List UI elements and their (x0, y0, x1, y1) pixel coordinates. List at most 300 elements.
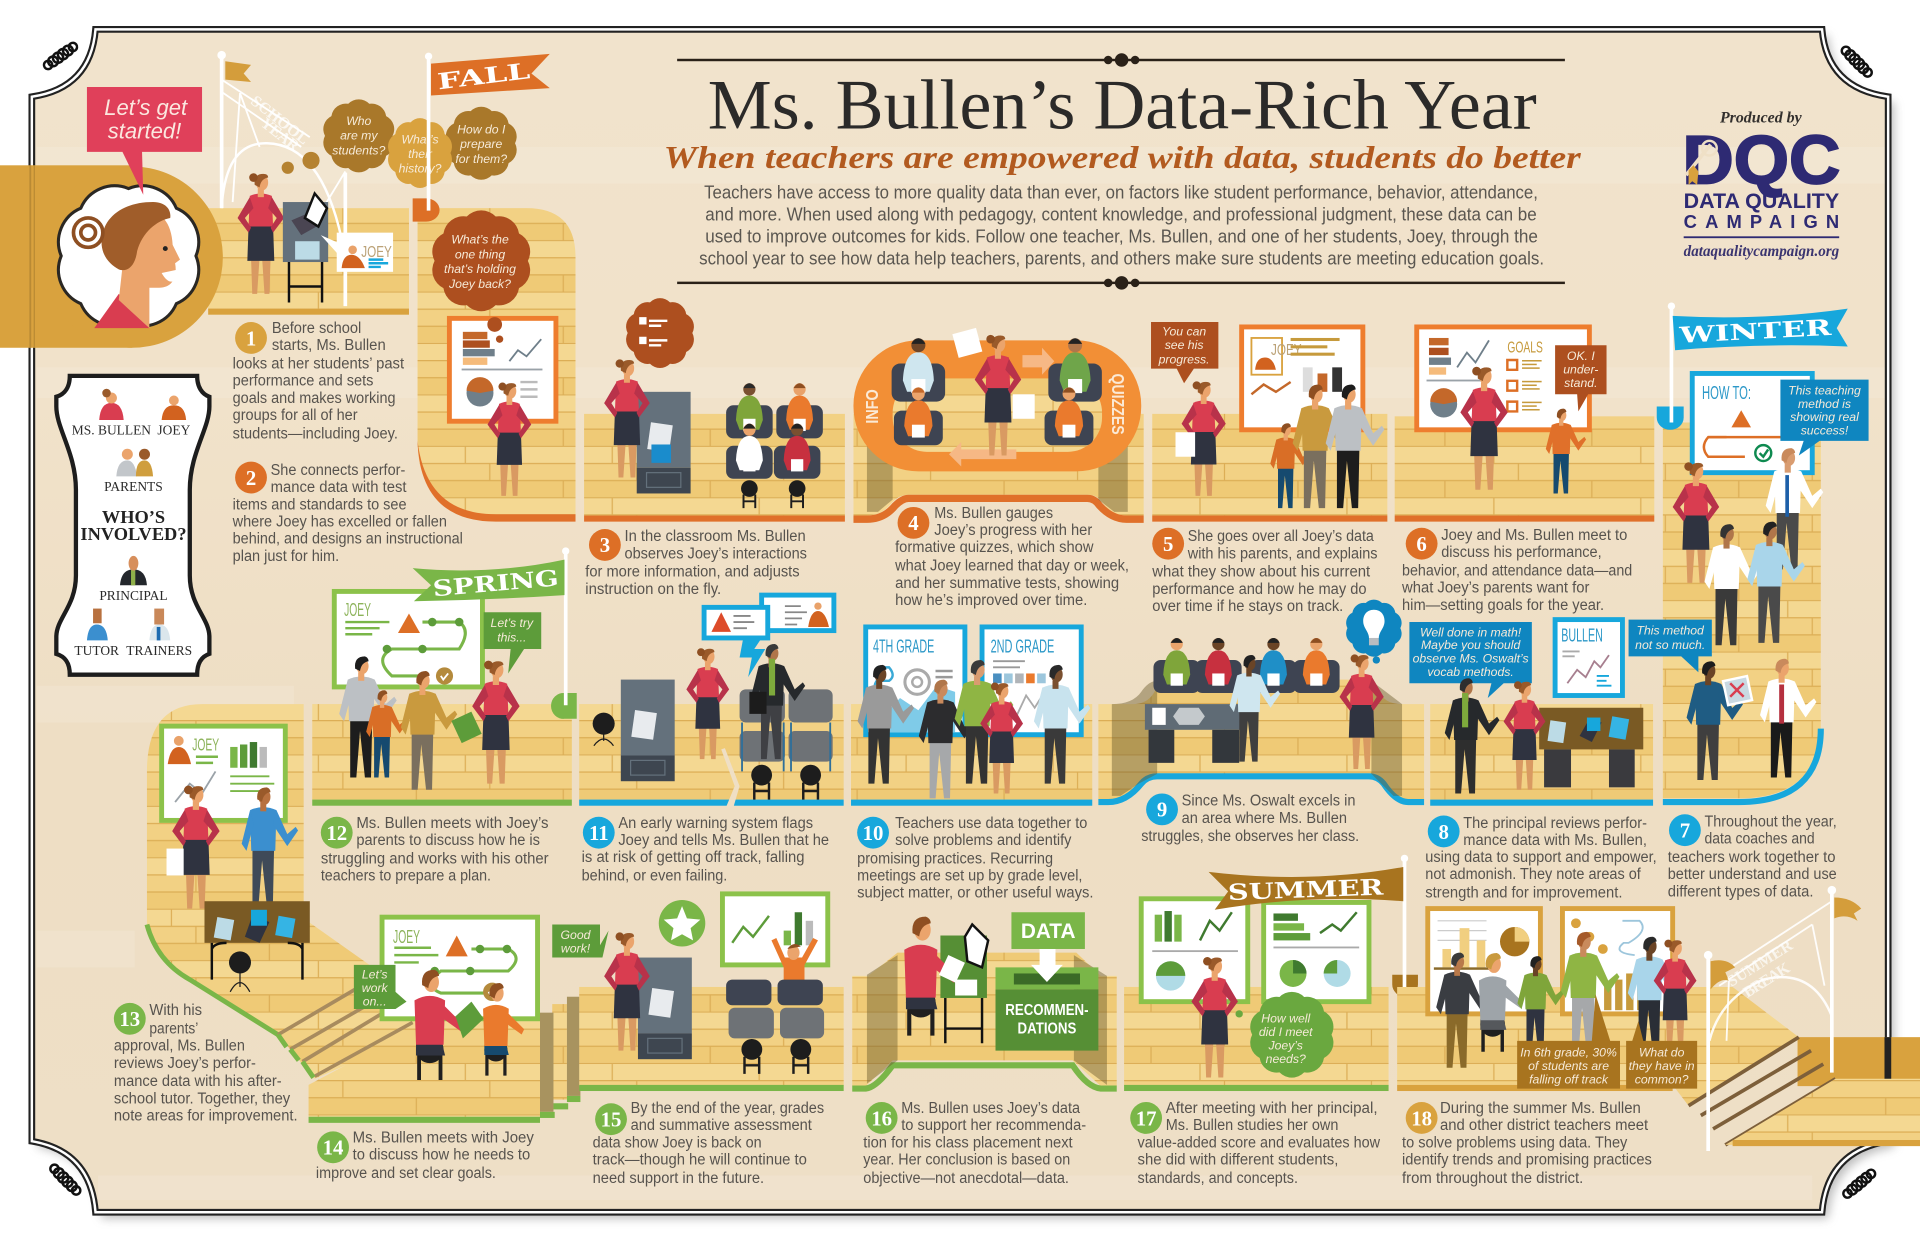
badge 8: 8 (1438, 820, 1449, 844)
text 10: meetings are set up by grade level, (857, 867, 1082, 884)
text 4: Joey’s progress with her (934, 522, 1092, 539)
desk (638, 958, 692, 1059)
text 1: Before school (272, 320, 361, 337)
badge 5 (1152, 528, 1184, 560)
cloud: how well did I meet needs (1236, 992, 1333, 1078)
cloud: how do I prepare (446, 107, 517, 180)
badge 18: 18 (1411, 1106, 1432, 1130)
badge 14: 14 (323, 1136, 344, 1160)
alert window: warning (704, 607, 768, 638)
title: Ms. Bullen’s Data-Rich Year (708, 67, 1537, 145)
floor (312, 704, 572, 806)
text 7: data coaches and (1704, 831, 1815, 848)
step 10 (857, 815, 1093, 902)
bubble: let's try this: Let’s try (491, 616, 534, 630)
badge 11 (583, 817, 615, 849)
portrait medallion (42, 167, 223, 348)
box: data (1011, 912, 1085, 949)
subtitle: When teachers are empowered with data, students do better (664, 140, 1582, 175)
student: green (726, 383, 773, 438)
icon: principal (120, 556, 147, 585)
step 17 (1130, 1100, 1381, 1187)
bubble: you can see his progress: see his (1165, 338, 1203, 352)
header block (664, 53, 1582, 290)
text 15: data show Joey is back on (593, 1134, 762, 1151)
student: orange (776, 383, 823, 438)
names row: MS. BULLEN (72, 423, 151, 438)
bubble: teaching method success: showing real (1790, 410, 1859, 424)
figure: Ms. Bullen (604, 932, 650, 1051)
text 5: She goes over all Joey’s data (1188, 528, 1374, 545)
floor (851, 704, 1092, 806)
floor: summer break (1725, 1079, 1920, 1145)
desk (204, 901, 310, 980)
floor (1152, 414, 1387, 522)
cloud: who are my students: are my (340, 129, 378, 143)
label: info: INFO (862, 389, 882, 424)
scalloped frame (58, 186, 199, 326)
corner ornament: top right (1839, 44, 1874, 79)
figure: tutor (242, 787, 298, 906)
face (119, 210, 180, 328)
flag: gate right (1834, 898, 1861, 921)
text 17: Ms. Bullen studies her own (1166, 1117, 1338, 1134)
poster: Bullen (1555, 620, 1622, 696)
text 6: behavior, and attendance data—and (1402, 563, 1632, 580)
figure: Ms. Bullen (1673, 462, 1719, 583)
text 10: Teachers use data together to (895, 815, 1087, 832)
text 16: year. Her conclusion is based on (863, 1151, 1070, 1168)
figure: Ms. Bullen (472, 661, 520, 784)
floor (584, 414, 845, 522)
figure: teacher in grey (858, 665, 914, 784)
text 1: groups for all of her (233, 407, 358, 424)
text 6: Joey and Ms. Bullen meet to (1441, 527, 1627, 544)
figure: Joey seated (483, 983, 524, 1076)
cloud: how well did I meet needs: Joey’s (1267, 1038, 1303, 1052)
card: Joey: JOEY (361, 244, 392, 261)
bubble: teaching method success (1780, 380, 1869, 456)
students watching (1153, 638, 1340, 693)
text 13: approval, Ms. Bullen (114, 1038, 245, 1055)
papers (939, 955, 965, 983)
text 3: In the classroom Ms. Bullen (624, 528, 806, 545)
poster: Joey plan (382, 917, 538, 1019)
text 11 (582, 815, 829, 884)
text 15 (593, 1100, 824, 1187)
figure: teacher in pale blue (1628, 937, 1684, 1056)
text 11: is at risk of getting off track, falling (582, 849, 804, 866)
badge 1 (235, 322, 267, 354)
corner ornament: top left (42, 40, 79, 72)
poster: how to (1692, 373, 1812, 473)
cloud: who are my students (323, 99, 394, 172)
bubble: teaching method success: This teaching (1788, 383, 1861, 397)
labels: tutor and trainers: TRAINERS (126, 643, 192, 658)
text 10: promising practices. Recurring (857, 850, 1053, 867)
figure: Ms. Bullen (1460, 367, 1508, 490)
text 11: An early warning system flags (618, 815, 813, 832)
badge 7: 7 (1680, 819, 1690, 843)
bubble: let's work on: Let’s (362, 967, 388, 981)
floor stripe (852, 1065, 1117, 1089)
figure: principal on phone (749, 644, 805, 759)
bubble: method not so much: This method (1637, 623, 1705, 637)
hair (102, 202, 170, 270)
floor (418, 208, 576, 516)
mouth (162, 269, 179, 282)
badge 6 (1406, 528, 1438, 560)
icon: trainers (149, 609, 170, 640)
figure: Joey (1546, 409, 1586, 493)
figure: Ms. Bullen seated (414, 970, 484, 1080)
text 3: observes Joey’s interactions (624, 545, 807, 562)
text 4: formative quizzes, which show (895, 539, 1094, 556)
bubble: well done in math: Well done in math! (1420, 626, 1522, 640)
chairs (740, 689, 833, 800)
text 3 (585, 528, 807, 598)
badge 9 (1146, 793, 1178, 825)
student: red (774, 424, 820, 479)
gate text: BREAK (1740, 959, 1794, 1001)
text 7: different types of data. (1668, 883, 1813, 900)
text 3: for more information, and adjusts (585, 564, 800, 581)
card with cross (1723, 676, 1752, 705)
text 6 (1401, 527, 1632, 614)
text 14: Ms. Bullen meets with Joey (353, 1129, 534, 1146)
floor with tunnel (853, 414, 1144, 516)
figure: mother (1293, 385, 1351, 508)
scene: formative quizzes (853, 328, 1144, 519)
poster: bar chart (1428, 909, 1540, 1014)
text 12: teachers to prepare a plan. (321, 867, 491, 884)
bubble: OK I understand: under- (1563, 362, 1598, 376)
floor (852, 953, 1117, 1086)
poster: Joey plan: JOEY (393, 926, 420, 947)
text 6: discuss his performance, (1441, 544, 1602, 561)
text 8: The principal reviews perfor- (1463, 815, 1647, 832)
text 9: Since Ms. Oswalt excels in (1182, 793, 1356, 810)
badge 6: 6 (1416, 532, 1427, 556)
text 4 (894, 505, 1129, 609)
bottom rule (677, 276, 1565, 290)
step 12 (321, 815, 549, 884)
badge 15: 15 (601, 1108, 621, 1132)
text 14: to discuss how he needs to (353, 1147, 530, 1164)
text 18 (1402, 1100, 1652, 1187)
desk (637, 392, 691, 493)
badge 4 (898, 507, 929, 539)
callout: let's get started (87, 87, 202, 195)
badge 8 (1428, 816, 1460, 847)
text 12 (321, 815, 549, 884)
website: dataqualitycampaign.org (1684, 243, 1840, 260)
text 2: mance data with test (271, 479, 407, 496)
text 8: mance data with Ms. Bullen, (1463, 832, 1647, 849)
bubble: method not so much (1629, 620, 1712, 672)
labels: tutor and trainers (74, 643, 192, 658)
poster: left (1141, 899, 1248, 1002)
bubble: teaching method success: success! (1801, 424, 1849, 438)
text 4: how he’s improved over time. (895, 592, 1087, 609)
text 7: Throughout the year, (1704, 814, 1837, 831)
desk with laptop (940, 924, 988, 1043)
produced by: Produced by (1720, 109, 1803, 126)
cloud: one thing holding Joey back: What’s the (451, 233, 509, 247)
bubble: you can see his progress (1151, 322, 1218, 383)
corner ornament: bottom left (48, 1162, 83, 1197)
badge 2 (235, 462, 267, 493)
tunnel shading (867, 955, 1107, 1085)
text 15: track—though he will continue to (593, 1151, 807, 1168)
poster: 4th grade: 4TH GRADE (873, 636, 934, 657)
stool (593, 713, 615, 746)
text 5: with his parents, and explains (1187, 545, 1378, 562)
step 7 (1668, 814, 1837, 900)
figure: Ms. Bullen (686, 648, 729, 759)
floor (1663, 422, 1821, 798)
box: data: DATA (1021, 920, 1075, 943)
step 4 (894, 505, 1129, 609)
text 13: note areas for improvement. (114, 1107, 298, 1124)
student: bottom right (1045, 387, 1093, 445)
figure: Ms. Bullen (1654, 940, 1697, 1051)
tunnel shading (1112, 681, 1402, 796)
floor stripe (1098, 776, 1424, 802)
text 2: where Joey has excelled or fallen (232, 514, 447, 531)
bubble: what do they have in common: What do (1639, 1046, 1685, 1060)
figure: teacher with red tie (1760, 659, 1816, 778)
figure: Joey cheering (771, 938, 818, 986)
names row: JOEY (157, 423, 191, 438)
text 16: tion for his class placement next (863, 1134, 1073, 1151)
bubble: 6th grade 30 percent: falling off track (1529, 1073, 1609, 1087)
bubble: what do they have in common (1626, 1021, 1697, 1089)
cloud: one thing holding Joey back (432, 210, 530, 311)
cloud: what's their history: What’s (401, 132, 439, 146)
floor upper (147, 704, 416, 1079)
figure: father (339, 656, 397, 778)
text 13: With his (149, 1002, 202, 1019)
floor crack (721, 748, 740, 807)
box: recommendations: RECOMMEN- (1005, 1002, 1089, 1019)
gate text: YEAR (257, 115, 303, 155)
text 1: starts, Ms. Bullen (272, 337, 386, 354)
floor stripe (853, 498, 1144, 519)
icon: star badge (659, 900, 705, 947)
cloud: one thing holding Joey back: one thing (455, 247, 505, 261)
top rule (677, 53, 1565, 67)
season flag: fall: FALL (436, 58, 531, 95)
step blocks (540, 997, 580, 1118)
figure: Ms. Bullen (1504, 681, 1545, 790)
student: white (726, 424, 773, 479)
scene: winter column (1629, 373, 1869, 802)
text 5 (1151, 528, 1378, 615)
text 7: teachers work together to (1668, 849, 1836, 866)
logo: Data Quality Campaign (1682, 109, 1840, 260)
cloud: what's their history (388, 118, 452, 188)
badge 13: 13 (119, 1007, 140, 1031)
figure: Ms. Oswalt (1230, 655, 1280, 762)
text 15: By the end of the year, grades (631, 1100, 824, 1117)
bubble: well done in math (1409, 622, 1532, 698)
figure: Ms. Bullen (604, 359, 650, 478)
cloud: how well did I meet needs: needs? (1266, 1052, 1306, 1066)
bubble: OK I understand: OK. I (1567, 349, 1595, 363)
floor stripe (147, 924, 278, 1035)
text 4: and her summative tests, showing (895, 575, 1119, 592)
text 1: performance and sets (233, 373, 374, 390)
orange track (853, 340, 1141, 471)
badge 10 (857, 817, 889, 849)
cloud: checklist (626, 298, 694, 368)
text 8: not admonish. They note areas of (1425, 866, 1641, 883)
bubble: good work: Good (561, 928, 592, 942)
bubble: OK I understand: stand. (1564, 376, 1597, 390)
scene: tutor floor and stairs (147, 704, 580, 1123)
figure: Ms. Bullen seated (904, 917, 957, 1036)
left gold band (0, 165, 132, 348)
student: top right (1048, 338, 1102, 402)
text 3: instruction on the fly. (585, 581, 721, 598)
figure: coach in blue (1687, 661, 1743, 780)
bubble: what do they have in common: common? (1635, 1073, 1689, 1087)
scene: grade level meetings (851, 627, 1092, 806)
bubble: let's work on: work (362, 981, 388, 995)
bubble: method not so much: not so much. (1635, 638, 1705, 652)
cloud: who are my students: Who (346, 114, 372, 128)
text 6: what Joey’s parents want for (1401, 580, 1589, 597)
cloud: how do I prepare: How do I (457, 122, 506, 136)
marker (1657, 407, 1684, 430)
names row (72, 423, 191, 438)
figure: father (1326, 385, 1384, 508)
scene: early warning (579, 595, 844, 807)
text 7: better understand and use (1668, 866, 1837, 883)
desk (1539, 708, 1643, 787)
bubble: let's work on: on... (363, 994, 387, 1008)
text 1: looks at her students’ past (233, 356, 405, 373)
figure: Ms. Bullen (980, 683, 1023, 793)
text 16: to support her recommenda- (901, 1117, 1086, 1134)
floor (579, 987, 844, 1091)
poster: GOALS (1507, 340, 1543, 357)
intro text: used to improve outcomes for kids. Follow one teacher, Ms. Bullen, and one of her students, Joey, through the (705, 225, 1538, 246)
poster (1242, 327, 1363, 430)
season flag: spring: SPRING (432, 565, 560, 602)
badge 16 (866, 1102, 898, 1134)
badge 1: 1 (246, 326, 256, 350)
badge 18 (1406, 1102, 1438, 1134)
cloud: how do I prepare: for them? (455, 152, 507, 166)
data quality: DATA QUALITY (1684, 190, 1839, 213)
poster: how to: HOW TO: (1702, 382, 1751, 403)
step 18 (1402, 1100, 1652, 1187)
desk (1145, 704, 1243, 763)
floor lower (309, 998, 540, 1117)
step 3 (585, 528, 807, 598)
scene: Joey goal meeting (1395, 327, 1654, 522)
icon: parents (116, 449, 153, 476)
cloud: how well did I meet needs: How well (1261, 1011, 1310, 1025)
text 11: Joey and tells Ms. Bullen that he (618, 832, 829, 849)
text 18: and other district teachers meet (1440, 1117, 1649, 1134)
text 17: standards, and concepts. (1138, 1170, 1298, 1187)
scene: before school floor and gate (208, 53, 517, 315)
text 13: parents’ (149, 1020, 198, 1037)
season flag: summer (1209, 855, 1418, 997)
badge 2: 2 (246, 466, 256, 490)
cloud: how do I prepare: prepare (459, 137, 503, 151)
figure: teacher seated (1479, 953, 1523, 1052)
floor stripe (418, 441, 576, 522)
thought dots (282, 152, 320, 174)
heading: who's involved: INVOLVED? (80, 524, 187, 544)
floor (208, 208, 409, 315)
season flag: fall (413, 53, 550, 222)
shirt (94, 294, 149, 328)
figure: mother (401, 671, 457, 790)
alert window: student (762, 595, 834, 631)
badge 5: 5 (1163, 532, 1173, 556)
floor stripe (1663, 729, 1821, 802)
figure: principal (1445, 678, 1499, 793)
school year gate (219, 53, 345, 306)
text 7 (1668, 814, 1837, 900)
floor (579, 704, 844, 806)
text 13 (114, 1002, 298, 1124)
label: parents: PARENTS (104, 479, 163, 494)
stools (741, 480, 805, 508)
text 17 (1138, 1100, 1381, 1187)
box: recommendations: DATIONS (1018, 1020, 1076, 1037)
desk with laptop (283, 193, 328, 302)
season flag: winter (1668, 302, 1848, 422)
text 17: she did with different students, (1138, 1151, 1338, 1168)
flag: gate left (1711, 960, 1735, 989)
gate text: SCHOOL (247, 93, 312, 148)
panel: who's involved (56, 376, 209, 675)
text 10: subject matter, or other useful ways. (857, 885, 1093, 902)
text 16: Ms. Bullen uses Joey’s data (901, 1100, 1080, 1117)
bubble: OK I understand (1555, 345, 1607, 411)
poster: Joey data: JOEY (192, 735, 220, 755)
text 9: struggles, she observes her class. (1141, 828, 1359, 845)
bubble: well done in math: Maybe you should (1421, 638, 1521, 652)
text 18: identify trends and promising practices (1402, 1151, 1652, 1168)
bubble: what do they have in common: they have in (1629, 1059, 1695, 1073)
box: recommendations (996, 949, 1098, 1051)
cloud: what's their history: their (408, 147, 433, 161)
poster: Bullen: BULLEN (1561, 625, 1603, 646)
cloud: how well did I meet needs: did I meet (1259, 1025, 1313, 1039)
label: principal: PRINCIPAL (99, 588, 168, 603)
desk (621, 680, 675, 781)
poster (449, 317, 556, 421)
text 15: need support in the future. (593, 1170, 764, 1187)
scene: district meeting (1397, 888, 1920, 1151)
cloud: who are my students: students? (332, 143, 385, 157)
figure: Joey (1270, 423, 1311, 508)
text 17: value-added score and evaluates how (1138, 1134, 1381, 1151)
cloud: lightbulb (1346, 600, 1402, 664)
scene: parent meeting (1151, 322, 1387, 522)
text 8: strength and for improvement. (1425, 885, 1622, 902)
text 16 (863, 1100, 1086, 1187)
floor stripe lower (309, 1117, 540, 1123)
badge 12: 12 (326, 821, 347, 845)
